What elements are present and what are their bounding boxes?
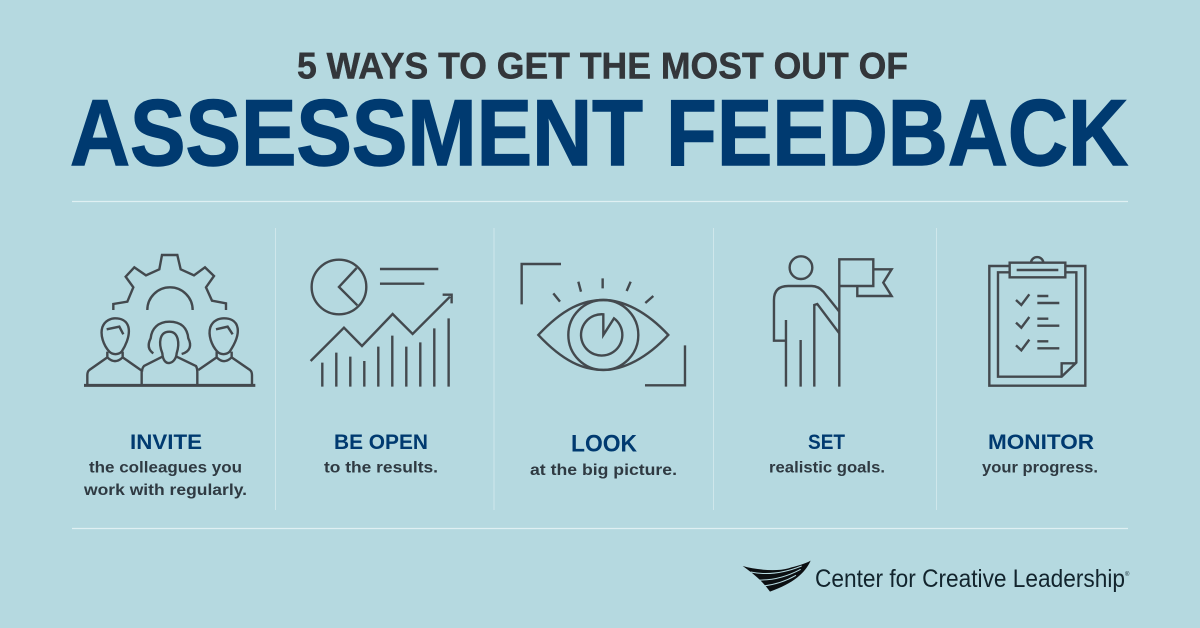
- column 3 text: at the big picture.: [530, 462, 677, 479]
- icon: eye in viewfinder: [522, 264, 685, 385]
- column 1 text: INVITE: [130, 431, 202, 454]
- column 4 text: realistic goals.: [769, 460, 885, 476]
- icon: team and gear: [84, 255, 255, 385]
- column 2 text: to the results.: [324, 460, 438, 476]
- logo mark: [743, 561, 811, 592]
- column 1 text: the colleagues you: [89, 460, 242, 476]
- title: small heading: 5 WAYS TO GET THE MOST OUT OF: [297, 46, 908, 86]
- icon: pie chart and rising graph: [311, 260, 452, 387]
- column 2 text: [324, 431, 438, 476]
- column 2 text: BE OPEN: [334, 431, 428, 454]
- logo: Center for Creative Leadership: ®: [1125, 571, 1130, 578]
- column 5 text: [982, 431, 1098, 476]
- column 4 text: [769, 431, 885, 476]
- icon: clipboard checklist: [989, 257, 1085, 386]
- icon: person with flag: [774, 256, 892, 387]
- logo wordmark: Center for Creative Leadership: [815, 565, 1125, 593]
- column 4 text: SET: [808, 431, 845, 454]
- column 1 text: [83, 431, 247, 499]
- column 3 text: [530, 430, 677, 479]
- column 1 text: work with regularly.: [83, 482, 247, 499]
- column 3 text: LOOK: [571, 430, 638, 458]
- logo: Center for Creative Leadership: [743, 561, 1130, 593]
- column 5 text: MONITOR: [988, 431, 1094, 454]
- column 5 text: your progress.: [982, 460, 1098, 476]
